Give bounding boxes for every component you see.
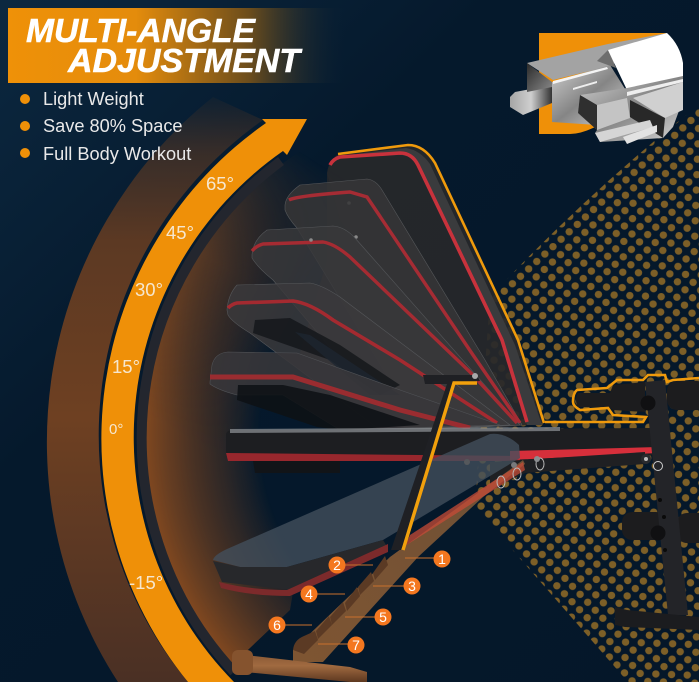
angle labels xyxy=(109,173,234,593)
incline support leg xyxy=(391,373,480,550)
steel tube detail icon xyxy=(510,33,683,144)
header banner xyxy=(8,8,345,83)
heading: ADJUSTMENT xyxy=(67,42,303,79)
feature list: Save 80% Space xyxy=(43,116,183,136)
callout 3: 3 xyxy=(408,578,416,594)
hinge pins xyxy=(464,456,544,488)
halftone dot pattern xyxy=(475,105,699,682)
feature list xyxy=(20,89,191,164)
roller orange outline xyxy=(545,375,699,422)
backrest at low incline xyxy=(210,352,500,430)
callout 7: 7 xyxy=(352,637,360,653)
angle labels: -15° xyxy=(129,572,163,593)
backrest at 45 degrees xyxy=(285,179,522,430)
heading: MULTI-ANGLE xyxy=(26,12,256,49)
flat seat pad at 0 degrees xyxy=(226,427,658,473)
callout 6: 6 xyxy=(273,617,281,633)
orange angle arrow xyxy=(101,119,307,682)
callout 2 xyxy=(328,556,373,574)
rear frame arm xyxy=(490,452,645,490)
rear floor bar xyxy=(615,607,699,630)
bench: stacked backrest positions xyxy=(210,144,658,473)
decline pad at minus 15 degrees xyxy=(213,434,520,596)
numbered adjustment callouts xyxy=(268,550,450,654)
angle arc glow xyxy=(46,98,310,682)
callout 5 xyxy=(345,608,392,626)
rear upright with foam rollers xyxy=(545,375,699,630)
callout 5: 5 xyxy=(379,609,387,625)
front foot bar xyxy=(232,650,367,682)
notch teeth xyxy=(293,556,388,654)
callout 1 xyxy=(405,550,450,568)
lower foam rollers xyxy=(622,512,666,540)
callout 4 xyxy=(300,586,345,602)
callout 2: 2 xyxy=(333,557,341,573)
angle labels: 15° xyxy=(112,356,140,377)
callout 3 xyxy=(373,578,420,594)
feature list: Full Body Workout xyxy=(43,144,191,164)
callout 1: 1 xyxy=(438,551,446,567)
callout 7 xyxy=(318,636,364,654)
angle labels: 45° xyxy=(166,222,194,243)
angle labels: 0° xyxy=(109,421,123,438)
angle labels: 65° xyxy=(206,173,234,194)
fan backdrop xyxy=(300,173,520,430)
upper foam rollers xyxy=(576,382,645,412)
callout 4: 4 xyxy=(305,586,313,602)
feature list: Light Weight xyxy=(43,89,144,109)
upright post xyxy=(645,380,688,615)
backrest at 30 degrees xyxy=(252,226,520,430)
backrest at 65 degrees xyxy=(327,144,545,428)
callout 6 xyxy=(268,616,312,634)
angle labels: 30° xyxy=(135,279,163,300)
brown front rail with notches xyxy=(293,460,525,662)
backrest at 15 degrees xyxy=(227,283,510,430)
